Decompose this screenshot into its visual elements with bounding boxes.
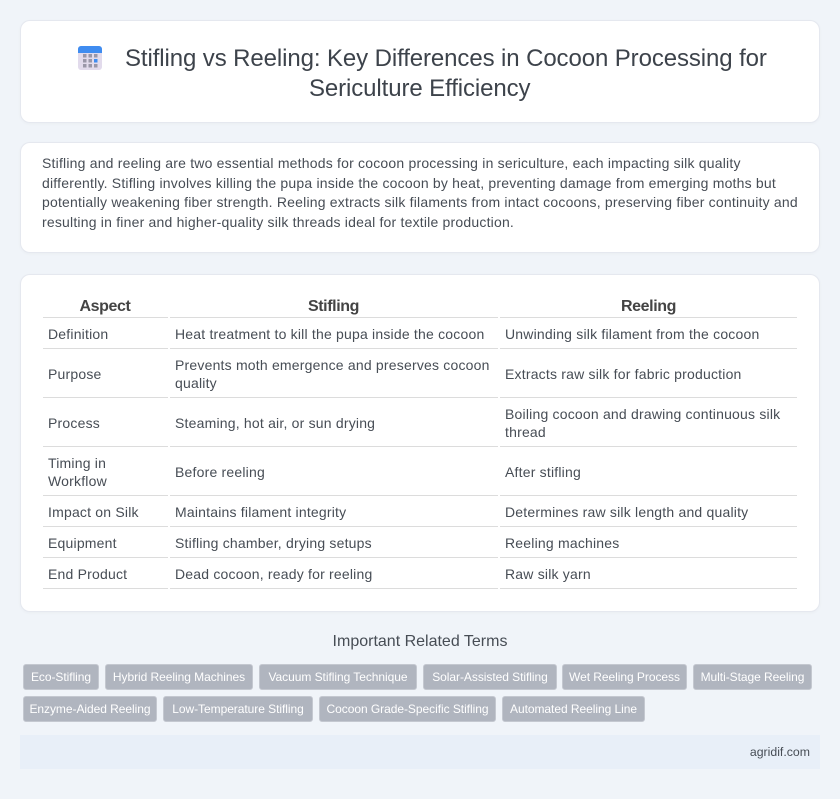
row: impact on silk: Maintains filament integrity: [175, 504, 346, 520]
row: timing in workflow: Workflow: [48, 473, 107, 489]
intro text: resulting in finer and higher-quality silk threads ideal for textile production.: [42, 214, 514, 230]
row: end product: End Product: [48, 566, 127, 582]
tags: related terms: Multi-Stage Reeling: [701, 670, 804, 684]
title: [125, 45, 767, 102]
row: equipment: Equipment: [48, 535, 117, 551]
row: process: Boiling cocoon and drawing continuous silk: [505, 406, 780, 422]
row: equipment: Stifling chamber, drying setups: [175, 535, 372, 551]
tags: related terms: Vacuum Stifling Technique: [268, 670, 408, 684]
tags: related terms: Solar-Assisted Stifling: [432, 670, 548, 684]
row: purpose: Extracts raw silk for fabric production: [505, 366, 742, 382]
row: purpose: Prevents moth emergence and preserves cocoon: [175, 357, 490, 373]
tags: related terms: [23, 664, 812, 722]
row: timing in workflow: Before reeling: [175, 464, 265, 480]
row: process: Steaming, hot air, or sun drying: [175, 415, 375, 431]
row: end product: [48, 566, 591, 582]
tags: related terms: Wet Reeling Process: [569, 670, 680, 684]
row: impact on silk: Impact on Silk: [48, 504, 139, 520]
row: purpose: Purpose: [48, 366, 102, 382]
row: process: Process: [48, 415, 100, 431]
table header: Reeling: [621, 298, 676, 315]
tags: related terms: Low-Temperature Stifling: [172, 702, 304, 716]
tags: related terms: Enzyme-Aided Reeling: [29, 702, 151, 716]
row: timing in workflow: After stifling: [505, 464, 581, 480]
intro text: differently. Stifling involves killing the pupa inside the cocoon by heat, preventing damage from emerging moths but: [42, 175, 776, 191]
table header: [80, 298, 676, 315]
title: Stifling vs Reeling: Key Differences in Cocoon Processing for: [125, 45, 767, 72]
icon: calendar: [78, 46, 102, 70]
row: definition: Unwinding silk filament from the cocoon: [505, 326, 759, 342]
panel: introduction: [20, 142, 820, 253]
panel: comparison table: [20, 274, 820, 612]
tags: related terms: Automated Reeling Line: [510, 702, 637, 716]
row: equipment: Reeling machines: [505, 535, 619, 551]
intro text: potentially weakening fiber strength. Reeling extracts silk filaments from intact cocoons, preserving fiber continuity and: [42, 194, 798, 210]
intro text: Stifling and reeling are two essential methods for cocoon processing in sericulture, each impacting silk quality: [42, 155, 741, 171]
row: impact on silk: [48, 504, 748, 520]
row: equipment: [48, 535, 619, 551]
footer: [20, 735, 820, 769]
row: process: thread: [505, 424, 546, 440]
table header: Aspect: [80, 298, 130, 315]
title: Sericulture Efficiency: [309, 75, 530, 102]
row: definition: Heat treatment to kill the pupa inside the cocoon: [175, 326, 484, 342]
tags: related terms: Hybrid Reeling Machines: [113, 670, 245, 684]
row: impact on silk: Determines raw silk length and quality: [505, 504, 748, 520]
row: end product: Raw silk yarn: [505, 566, 591, 582]
row: purpose: [48, 357, 742, 391]
panel: header: [20, 20, 820, 123]
row: timing in workflow: [48, 455, 581, 489]
row: purpose: quality: [175, 375, 217, 391]
row: definition: Definition: [48, 326, 108, 342]
row: definition: [48, 326, 759, 342]
row: end product: Dead cocoon, ready for reeling: [175, 566, 372, 582]
tags: related terms: Eco-Stifling: [31, 670, 91, 684]
tags: related terms: Cocoon Grade-Specific Stifling: [327, 702, 488, 716]
source: agridif.com: [750, 745, 810, 759]
heading: important related terms: Important Related Terms: [333, 633, 507, 650]
intro text: [42, 155, 798, 230]
row: process: [48, 406, 780, 440]
row: timing in workflow: Timing in: [48, 455, 106, 471]
table header: Stifling: [308, 298, 359, 315]
